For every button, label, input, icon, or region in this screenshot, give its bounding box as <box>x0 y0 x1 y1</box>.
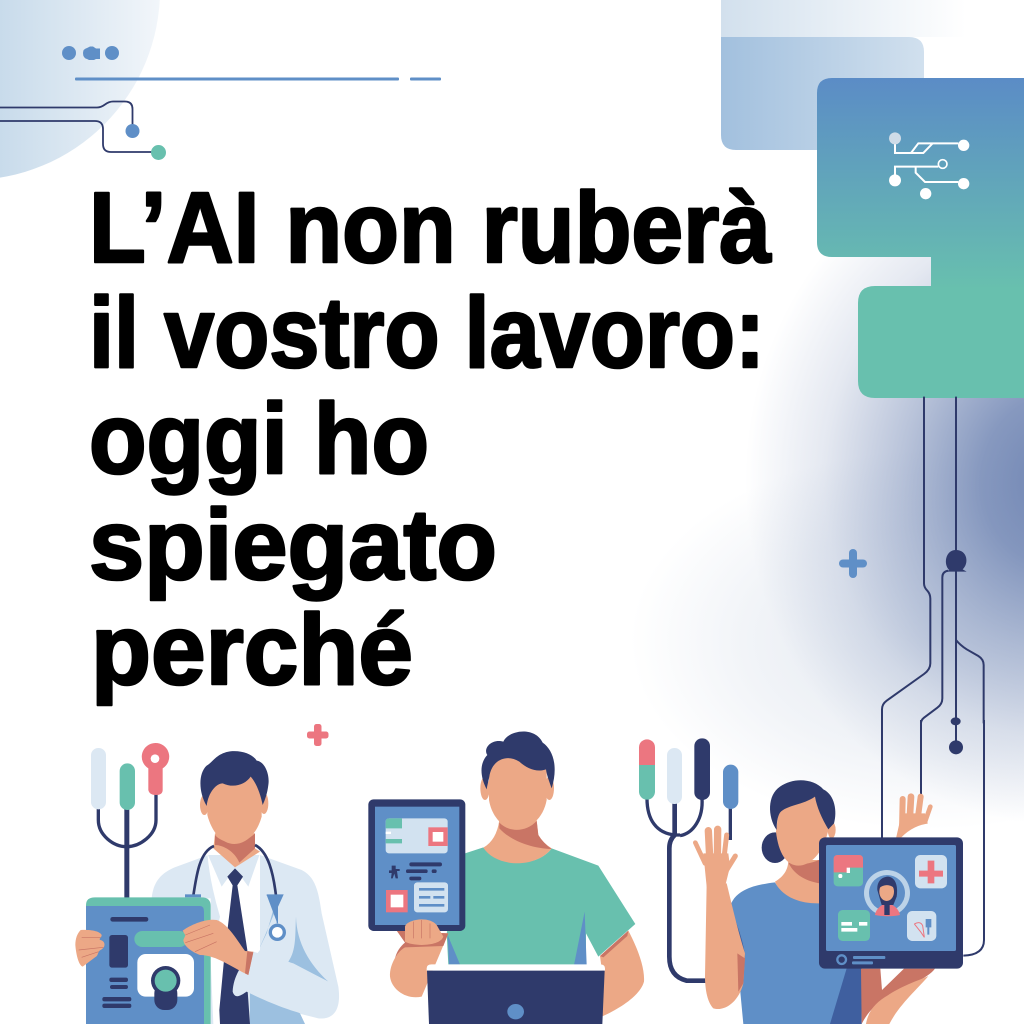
woman neck <box>775 860 830 905</box>
doctor coat <box>152 855 339 1024</box>
tablet <box>368 799 465 931</box>
top-right soft blue panel <box>721 37 924 150</box>
circuit lines top left <box>0 102 166 160</box>
arm shade <box>737 953 745 992</box>
woman raised arm <box>705 883 745 1009</box>
woman head <box>770 780 836 866</box>
monitor <box>819 837 963 969</box>
coat shadow <box>250 897 328 1024</box>
man fingers <box>405 919 443 945</box>
figure: doctor <box>75 743 339 1024</box>
probes: centre right <box>639 739 711 981</box>
laptop <box>427 964 605 1024</box>
title: il vostro lavoro: <box>89 277 765 389</box>
woman torso <box>730 882 862 1024</box>
title: spiegato <box>89 489 497 601</box>
background haze: right side <box>630 130 1024 830</box>
title: oggi ho <box>89 383 429 495</box>
doctor probes <box>91 743 169 898</box>
top-right pale band <box>721 0 966 37</box>
man shirt <box>447 847 635 965</box>
torso shade <box>730 907 862 1024</box>
man neck shade <box>499 821 552 849</box>
doctor sleeve <box>233 952 335 1018</box>
device held by doctor <box>86 897 211 1024</box>
neck shade <box>788 857 827 884</box>
probes: dark and blue <box>680 738 738 840</box>
title: perché <box>91 594 413 706</box>
arm shade <box>395 931 448 958</box>
man left arm and hand <box>390 931 448 997</box>
shirt folds <box>448 912 587 965</box>
neck shade <box>215 833 255 863</box>
woman raised hand <box>695 829 735 887</box>
doctor hands <box>75 920 253 975</box>
icon: circuit <box>889 132 969 199</box>
man right arm <box>600 931 644 1017</box>
title <box>89 172 771 706</box>
doctor head <box>200 751 269 844</box>
woman second arm <box>861 969 935 1024</box>
plus icon blue <box>839 549 867 578</box>
man neck <box>483 820 552 863</box>
title: L’AI non ruberà <box>89 172 771 284</box>
doctor neck <box>213 833 260 867</box>
circuit lines lower right <box>882 720 984 956</box>
top-left dots and rule <box>62 46 441 80</box>
woman bun <box>762 832 788 863</box>
plus icon red <box>307 724 328 746</box>
woman forearm <box>866 976 928 1024</box>
sleeve shade <box>600 931 628 957</box>
figure: man with tablet and laptop <box>368 732 644 1024</box>
figure: woman with monitor <box>695 780 963 1024</box>
circuit lines right <box>882 397 984 754</box>
doctor tie <box>219 868 250 1024</box>
doctor shirt <box>207 853 260 1024</box>
decorative circle top left <box>0 0 160 180</box>
doctor stethoscope <box>185 845 284 939</box>
woman left hand behind monitor <box>896 797 932 838</box>
top-right gradient block <box>817 78 1024 398</box>
man head <box>480 732 555 829</box>
